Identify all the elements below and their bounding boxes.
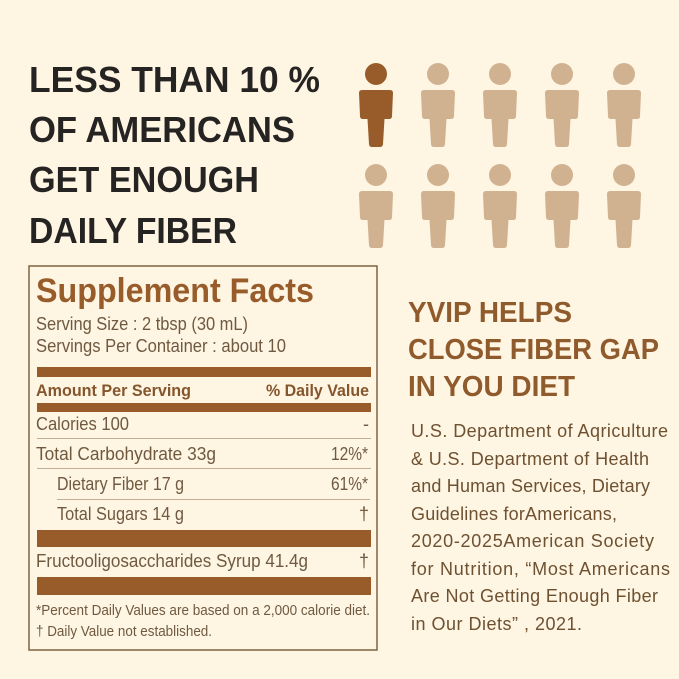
serving information: Servings Per Container : about 10 (36, 336, 286, 356)
text block: sources: Guidelines forAmericans, (411, 504, 617, 524)
heading: yvip helps close fiber gap: CLOSE FIBER GAP (408, 334, 659, 366)
row: dietary fiber: Dietary Fiber 17 g (57, 474, 184, 494)
text block: sources: and Human Services, Dietary (411, 476, 650, 496)
panel: supplement facts (29, 266, 377, 650)
footnotes (36, 603, 370, 640)
row: total carbohydrate: 12%* (331, 444, 368, 464)
row: dietary fiber (57, 474, 368, 494)
icon: highlighted person (359, 63, 393, 147)
row: calories: Calories 100 (36, 414, 129, 434)
serving information (36, 314, 286, 356)
text block: sources: & U.S. Department of Health (411, 449, 649, 469)
title: fiber statistic: OF AMERICANS (29, 109, 295, 150)
text block: sources (411, 421, 670, 634)
header bars and columns (36, 367, 371, 412)
row: total carbohydrate: Total Carbohydrate 33g (36, 444, 216, 464)
row: fructooligosaccharides: Fructooligosaccharides Syrup 41.4g (36, 551, 308, 571)
row: total sugars: Total Sugars 14 g (57, 504, 184, 524)
row: total sugars (57, 504, 369, 524)
row: total carbohydrate (36, 444, 368, 464)
heading: yvip helps close fiber gap: IN YOU DIET (408, 371, 575, 403)
footnotes: *Percent Daily Values are based on a 2,000 calorie diet. (36, 603, 370, 619)
text block: sources: U.S. Department of Aqriculture (411, 421, 668, 441)
row: calories: - (363, 414, 369, 434)
text block: sources: in Our Diets” , 2021. (411, 614, 582, 634)
heading: yvip helps close fiber gap (408, 297, 659, 403)
row: fructooligosaccharides: † (359, 551, 369, 571)
footnotes: † Daily Value not established. (36, 624, 212, 640)
heading: supplement facts: Supplement Facts (36, 272, 314, 310)
row: total sugars: † (359, 504, 369, 524)
title: fiber statistic: DAILY FIBER (29, 210, 237, 251)
text block: sources: Are Not Getting Enough Fiber (411, 586, 658, 606)
row: calories (36, 414, 369, 434)
serving information: Serving Size : 2 tbsp (30 mL) (36, 314, 248, 334)
row: dietary fiber: 61%* (331, 474, 368, 494)
title: fiber statistic: GET ENOUGH (29, 159, 259, 200)
title: fiber statistic (29, 59, 320, 251)
header bars and columns: Amount Per Serving (36, 381, 191, 400)
text block: sources: 2020-2025American Society (411, 531, 654, 551)
heading: yvip helps close fiber gap: YVIP HELPS (408, 297, 572, 329)
header bars and columns: % Daily Value (266, 381, 369, 400)
title: fiber statistic: LESS THAN 10 % (29, 59, 320, 100)
pictogram: one in ten people (359, 63, 641, 248)
text block: sources: for Nutrition, “Most Americans (411, 559, 670, 579)
